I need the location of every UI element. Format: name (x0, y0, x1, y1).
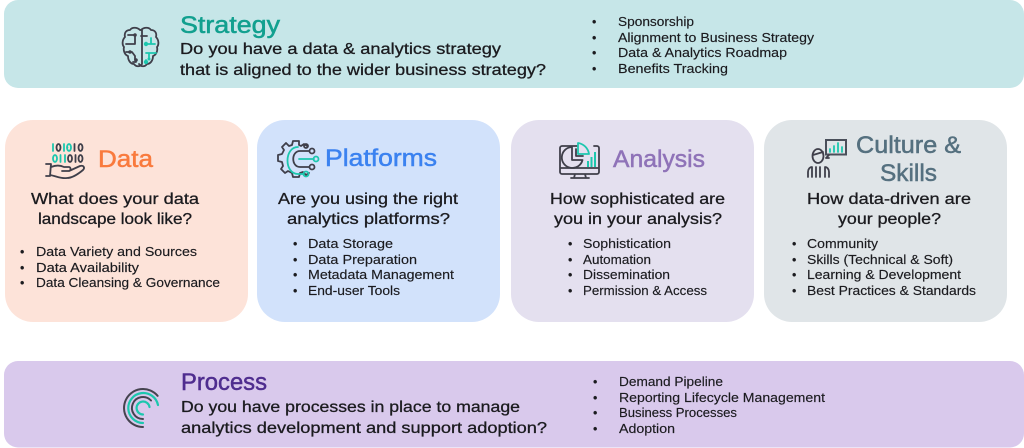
heading: process: Process (181, 369, 267, 396)
question: culture and skills: How data-driven are (807, 191, 971, 208)
list: analysis topics: • (568, 284, 572, 298)
list: platforms topics: • (293, 237, 297, 251)
question: culture and skills (807, 191, 971, 228)
list: strategy topics: • (592, 15, 596, 29)
list: analysis topics: Permission & Access (583, 284, 707, 298)
icon: concentric arcs (124, 389, 158, 427)
panel: data (5, 120, 248, 322)
question: platforms (278, 191, 459, 228)
list: strategy topics: Sponsorship (618, 15, 694, 29)
list: process topics: • (593, 406, 597, 420)
panel: culture and skills (764, 120, 1007, 322)
icon: data in hand (46, 144, 84, 178)
question: analysis: you in your analysis? (554, 211, 722, 228)
list: strategy topics (592, 15, 815, 76)
heading: culture and skills: Culture & (856, 132, 961, 159)
list: platforms topics: Data Storage (308, 237, 393, 251)
question: analysis (550, 191, 725, 228)
list: platforms topics: • (293, 268, 297, 282)
list: culture and skills topics (792, 237, 976, 298)
question: strategy (180, 41, 546, 79)
question: process: Do you have processes in place to manage (181, 399, 520, 416)
list: data topics: Data Variety and Sources (36, 245, 197, 259)
list: analysis topics (568, 237, 707, 298)
list: strategy topics: Benefits Tracking (618, 62, 728, 76)
panel: process (4, 361, 1024, 448)
question: strategy: Do you have a data & analytics strategy (180, 41, 501, 58)
icon: monitor with charts (560, 143, 599, 178)
list: analysis topics: • (568, 253, 572, 267)
list: platforms topics (293, 237, 455, 298)
list: strategy topics: • (592, 31, 596, 45)
question: analysis: How sophisticated are (550, 191, 725, 208)
icon: brain (123, 28, 158, 66)
list: strategy topics: • (592, 46, 596, 60)
list: process topics: Demand Pipeline (619, 375, 723, 389)
list: platforms topics: End-user Tools (308, 284, 400, 298)
panel: analysis (511, 120, 754, 322)
heading: strategy: Strategy (180, 12, 280, 39)
list: process topics: • (593, 391, 597, 405)
list: platforms topics: • (293, 253, 297, 267)
question: platforms: analytics platforms? (287, 211, 450, 228)
list: data topics: Data Cleansing & Governance (36, 276, 220, 290)
list: culture and skills topics: Community (807, 237, 879, 251)
list: data topics: • (20, 245, 24, 259)
list: strategy topics: • (592, 62, 596, 76)
list: process topics: Business Processes (619, 406, 737, 420)
list: data topics: • (20, 261, 24, 275)
heading: analysis: Analysis (613, 146, 705, 173)
list: platforms topics: Metadata Management (308, 268, 455, 282)
question: data (31, 191, 199, 228)
list: culture and skills topics: Learning & Development (807, 268, 962, 282)
list: culture and skills topics: • (792, 268, 796, 282)
icon: person with chart bubble (808, 140, 846, 177)
question: data: What does your data (31, 191, 199, 208)
panel: strategy (4, 0, 1024, 88)
list: platforms topics: • (293, 284, 297, 298)
list: culture and skills topics: Best Practices & Standards (807, 284, 976, 298)
list: process topics: • (593, 375, 597, 389)
list: culture and skills topics: • (792, 284, 796, 298)
list: platforms topics: Data Preparation (308, 253, 417, 267)
question: platforms: Are you using the right (278, 191, 459, 208)
panel: platforms (257, 120, 500, 322)
list: strategy topics: Alignment to Business Strategy (618, 31, 815, 45)
list: data topics: • (20, 276, 24, 290)
list: process topics: Adoption (619, 422, 675, 436)
list: culture and skills topics: Skills (Technical & Soft) (807, 253, 953, 267)
heading: platforms: Platforms (325, 145, 437, 172)
list: culture and skills topics: • (792, 237, 796, 251)
heading: data: Data (98, 146, 154, 173)
list: analysis topics: • (568, 237, 572, 251)
question: process: analytics development and support adoption? (181, 420, 547, 437)
list: process topics: • (593, 422, 597, 436)
question: strategy: that is aligned to the wider business strategy? (180, 62, 546, 79)
list: process topics (593, 375, 826, 436)
list: analysis topics: Sophistication (583, 237, 671, 251)
heading: culture and skills (856, 132, 961, 187)
list: data topics (20, 245, 220, 290)
question: process (181, 399, 547, 437)
heading: culture and skills: Skills (880, 160, 937, 187)
list: analysis topics: Automation (583, 253, 651, 267)
list: data topics: Data Availability (36, 261, 140, 275)
question: culture and skills: your people? (838, 211, 941, 228)
list: analysis topics: • (568, 268, 572, 282)
list: analysis topics: Dissemination (583, 268, 670, 282)
icon: gear with circuit (278, 141, 318, 177)
list: strategy topics: Data & Analytics Roadmap (618, 46, 787, 60)
list: process topics: Reporting Lifecycle Management (619, 391, 826, 405)
list: culture and skills topics: • (792, 253, 796, 267)
question: data: landscape look like? (38, 211, 192, 228)
